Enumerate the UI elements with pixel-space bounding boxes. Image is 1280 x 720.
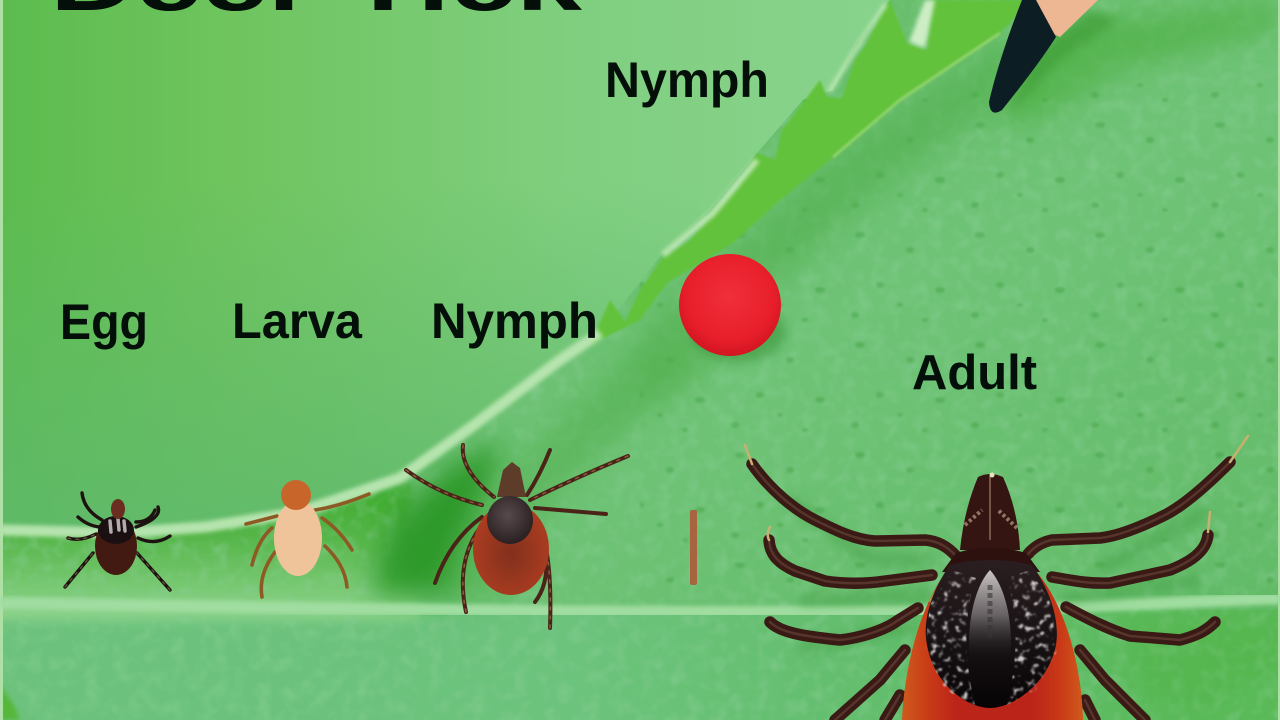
icon: egg stage tick [65, 493, 170, 590]
adult tick legs [752, 462, 1230, 720]
adult tick scutum [926, 560, 1057, 708]
adult tick leg highlights [752, 462, 1230, 720]
adult tick abdomen [902, 565, 1083, 720]
icon: red ball size reference [679, 254, 786, 362]
label: egg: Egg [60, 294, 148, 350]
adult tick shoulder [942, 548, 1040, 572]
label: larva: Larva [232, 293, 363, 349]
adult tick palps detail [965, 510, 1017, 528]
label: nymph upper: Nymph [605, 52, 769, 108]
adult tick speckled right side [1007, 571, 1057, 705]
adult tick center groove [988, 585, 992, 640]
leaf edge: serrated fringe [0, 0, 1030, 533]
adult tick center line [989, 476, 991, 540]
adult tick leg claws [745, 436, 1248, 540]
icon: adult stage tick [745, 436, 1248, 720]
adult tick shadow [790, 500, 1210, 650]
icon: larva stage tick [246, 480, 369, 597]
icon: small brown rod [690, 510, 697, 585]
adult tick tip [990, 472, 994, 478]
label: adult: Adult [912, 346, 1037, 400]
midrib of the leaf [0, 598, 1280, 612]
adult tick margin [930, 567, 1050, 602]
adult tick highlight [969, 570, 1011, 660]
adult tick speckled left side [925, 571, 976, 705]
icon: pencil tip [989, 0, 1120, 118]
adult tick mouthparts [960, 474, 1020, 550]
icon: nymph stage tick [406, 445, 628, 628]
label: nymph lower: Nymph [431, 293, 598, 349]
